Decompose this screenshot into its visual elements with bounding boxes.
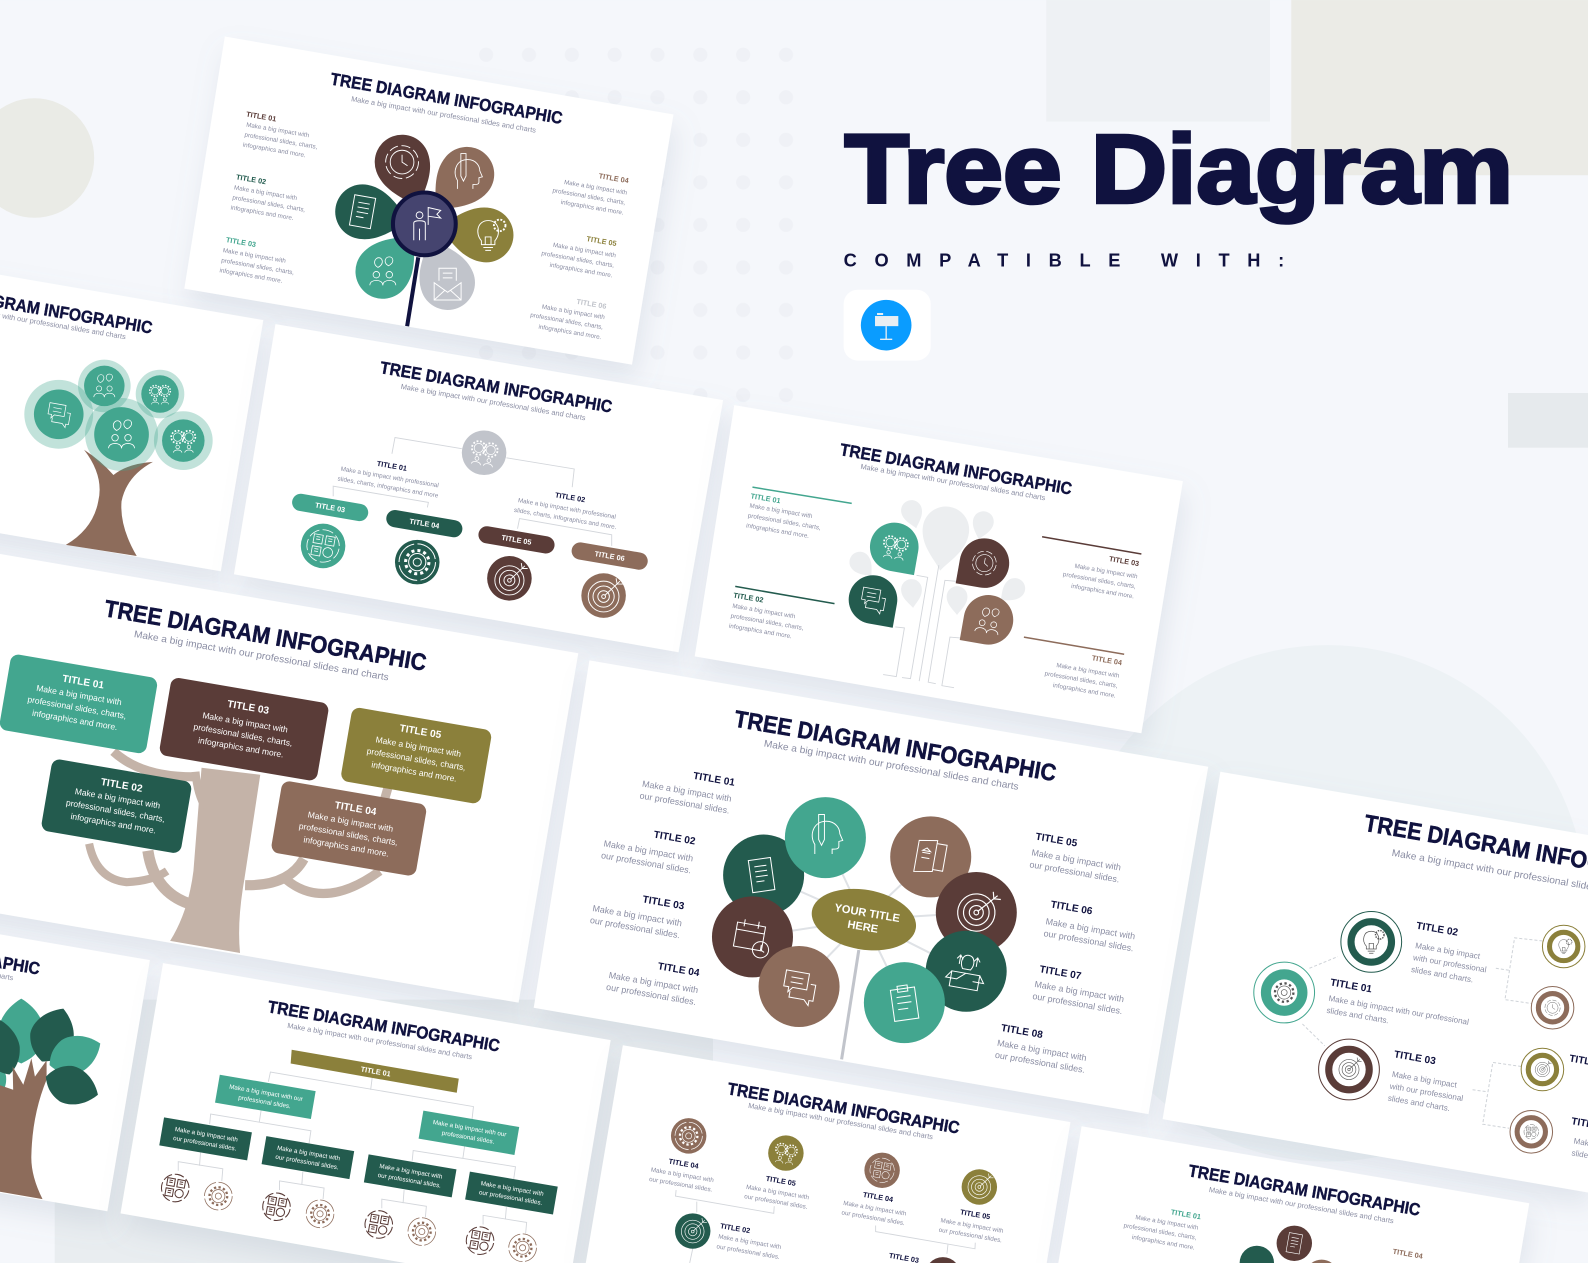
icon circles <box>301 524 626 618</box>
text: body 01: Make a big impact with <box>1135 1214 1199 1231</box>
flower diagram <box>331 127 518 318</box>
slide: flower tree <box>184 37 673 365</box>
heading: Tree Diagram: Tree Diagram <box>845 115 1513 224</box>
canopy circles <box>24 360 213 471</box>
tree lines <box>883 565 961 688</box>
text: body 01: slides, charts, infographics and more <box>337 475 439 499</box>
box: title 04: infographics and more. <box>303 834 390 859</box>
node: title 04 <box>671 1118 706 1154</box>
text: body 02: infographics and more. <box>230 204 294 222</box>
text: title 04: TITLE 04 <box>598 171 630 185</box>
text: body 01: Make a big impact with our professional <box>1328 993 1470 1026</box>
text: body 04: Make a big impact with <box>608 970 699 995</box>
text: body 05: infographics and more. <box>549 261 613 279</box>
green box 1 <box>159 1117 252 1160</box>
slide: org tree with pills <box>234 324 723 652</box>
rule line 04 <box>1024 637 1124 654</box>
text: body 02: Make a big impact with <box>718 1233 782 1251</box>
text: body 03: Make a big impact with <box>1074 562 1139 580</box>
text: title 01: TITLE 01 <box>692 771 736 789</box>
text: body 01: our professional slides. <box>639 790 730 816</box>
box: title 04: Make a big impact with <box>307 809 394 834</box>
text: body 05: Make a big impact with <box>1031 847 1122 872</box>
text: title 03: TITLE 03 <box>1393 1049 1437 1067</box>
slide: ring node tree <box>1163 772 1588 1192</box>
box: title 02: professional slides, charts, <box>65 797 166 824</box>
text: body 03: Make a big impact with <box>592 903 683 928</box>
node: title 01 <box>1254 962 1315 1023</box>
slide subtitle: Make a big impact with our professional slides and charts <box>133 629 390 684</box>
text: title 01: TITLE 01 <box>1329 977 1373 995</box>
text: body 06: infographics and more. <box>538 323 602 341</box>
tree nodes <box>1240 1226 1332 1263</box>
text: body 01: infographics and more. <box>746 522 810 540</box>
rule lines <box>752 487 852 503</box>
text: body 05 second: Make a big impact with <box>940 1217 1005 1234</box>
text: title 04: TITLE 04 <box>657 961 701 979</box>
text: body 03: our professional slides. <box>589 915 681 940</box>
text: title 03: TITLE 03 <box>1108 554 1140 568</box>
text: body 02: infographics and more. <box>728 622 793 640</box>
text: body 02: professional slides, charts, <box>232 194 306 213</box>
green box 2 <box>262 1136 354 1179</box>
front leaf <box>40 1059 104 1113</box>
text: body 03: slides and charts. <box>1387 1093 1451 1113</box>
slide subtitle: Make a big impact with our professional slides and charts <box>350 94 537 135</box>
text: body 05: our professional slides. <box>744 1193 808 1210</box>
pill: title 05 <box>477 525 556 555</box>
tree trunk <box>66 450 153 556</box>
box: title 04 <box>270 780 427 877</box>
slide: bottom right tree <box>1058 1126 1529 1263</box>
slide: circle canopy tree <box>0 257 263 571</box>
text: title 04: TITLE 04 <box>668 1157 700 1171</box>
tree stem <box>407 257 418 326</box>
box: title 03: professional slides, charts, <box>193 721 293 748</box>
text: body 05 second: our professional slides. <box>938 1226 1003 1244</box>
text: body 02: our professional slides. <box>600 850 692 875</box>
text: title 01: TITLE 01 <box>246 110 277 124</box>
icon: keynote badge <box>844 290 931 361</box>
text: body 04: infographics and more. <box>560 198 624 216</box>
tree trunk and branches <box>89 752 388 953</box>
text: body 03: infographics and more. <box>219 267 283 284</box>
text: body 04: our professional slides. <box>605 982 697 1007</box>
slide background <box>1163 772 1588 1192</box>
green box 3: our professional slides. <box>377 1171 442 1189</box>
slide background <box>0 546 578 1003</box>
pill: title 06: TITLE 06 <box>594 549 625 563</box>
text: body 06: our professional slides. <box>1043 928 1134 953</box>
centre oval: HERE <box>846 919 879 936</box>
green box 4: Make a big impact with <box>480 1180 545 1197</box>
teal box 2: professional slides. <box>441 1129 495 1145</box>
text: title 02: TITLE 02 <box>235 172 267 186</box>
text: title 03: TITLE 03 <box>225 235 257 249</box>
text: body 03: infographics and more. <box>1071 582 1135 600</box>
text: body 02: slides, charts, infographics and more. <box>514 506 617 531</box>
box: title 05: Make a big impact with <box>375 734 462 759</box>
pill: title 03 <box>291 492 370 522</box>
rule line 03 <box>1042 537 1141 554</box>
teal box 1 <box>215 1075 316 1119</box>
slide title: TREE DIAGRAM INFOGRAPHIC <box>732 706 1058 787</box>
centre oval: YOUR TITLE <box>833 902 901 925</box>
teal box 2: Make a big impact with our <box>432 1119 507 1138</box>
slide: hierarchy chart <box>121 963 611 1263</box>
tree trunk <box>0 1058 47 1199</box>
node: title 03 <box>1319 1039 1379 1100</box>
text: body 01: slides and charts. <box>1326 1005 1390 1025</box>
text: body 06: professional slides, charts, <box>530 311 604 331</box>
text: body 04: professional slides, charts, <box>552 187 626 206</box>
green box 4 <box>465 1172 558 1215</box>
slide subtitle: Make a big impact with our professional slides and charts <box>860 462 1046 502</box>
centre oval <box>807 881 921 958</box>
decorative large circle <box>1069 645 1586 1162</box>
box: title 02 <box>40 758 192 854</box>
leaves behind trunk <box>0 999 108 1098</box>
box: title 01: TITLE 01 <box>61 674 105 692</box>
text: title 07: TITLE 07 <box>1039 964 1082 982</box>
box: title 02: TITLE 02 <box>100 777 144 795</box>
text: body 03: with our professional <box>1388 1081 1464 1103</box>
green box 1: our professional slides. <box>173 1135 237 1152</box>
text: title 02: TITLE 02 <box>653 830 697 848</box>
connector spokes <box>752 838 976 1003</box>
text: body 08: our professional slides. <box>994 1050 1086 1075</box>
pill: title 06 <box>570 541 649 571</box>
slide title: TREE DIAGRAM INFOGRAPHIC <box>102 595 428 677</box>
slide: circles with brackets <box>586 1045 1070 1263</box>
slide title: TREE DIAGRAM INFOGRAPHIC <box>1187 1160 1422 1220</box>
slide subtitle: Make a big impact with our professional slides and charts <box>1208 1185 1395 1225</box>
bubble cluster right <box>864 816 1017 1043</box>
slide subtitle: Make a big impact with our professional slides and charts <box>747 1101 934 1141</box>
text: body 04: our professional slides. <box>649 1176 713 1193</box>
text: title 05: TITLE 05 <box>586 234 617 248</box>
green box 3 <box>364 1154 456 1197</box>
text: body 02: our professional slides. <box>716 1243 781 1261</box>
text: title 04: TITLE 04 <box>1392 1247 1424 1261</box>
slide subtitle: Make a big impact with our professional slides and charts <box>287 1021 473 1061</box>
small nodes <box>1510 925 1585 1153</box>
node: title 05 <box>768 1135 804 1171</box>
top node <box>462 430 506 475</box>
slide background <box>0 883 150 1211</box>
text: title 04: TITLE 04 <box>1091 653 1124 667</box>
text: title 05: TITLE 05 <box>1035 832 1078 850</box>
node: title 03 <box>930 1257 956 1263</box>
node: title 02 <box>1341 912 1402 972</box>
text: title 08: TITLE 08 <box>1000 1023 1044 1041</box>
text: body 03: Make a big impact with <box>222 247 287 264</box>
text: body 04 second: Make a big impact with <box>843 1199 907 1217</box>
slide title: TREE DIAGRAM INFOGRAPHIC <box>266 996 501 1056</box>
text: title 05: TITLE 05 <box>765 1174 797 1188</box>
small icons row <box>159 1172 536 1262</box>
box: title 05: professional slides, charts, <box>366 746 466 772</box>
slide title: TREE DIAGRAM INFOGRAPHIC <box>329 69 564 128</box>
decorative block bottom <box>55 1000 713 1263</box>
slide background <box>184 37 673 365</box>
slide background <box>586 1045 1070 1263</box>
green box 4: our professional slides. <box>478 1189 543 1206</box>
text: title 03: TITLE 03 <box>642 894 685 912</box>
title bar <box>291 1050 459 1093</box>
slide title: TREE DIAGRAM INFOGRAPHIC <box>379 357 614 417</box>
text: body 02: slides and charts. <box>1411 965 1474 984</box>
text: body 02: Make a big impact <box>1415 941 1482 961</box>
rule line 02 <box>735 586 835 604</box>
slide title: TREE DIAGRAM INFOGRAPHIC <box>839 439 1074 499</box>
subheading: compatible with: COMPATIBLE WITH: <box>844 250 1284 270</box>
box: title 01: infographics and more. <box>31 708 118 732</box>
text: body 01: Make a big impact with <box>246 121 310 139</box>
pill: title 04 <box>385 509 464 539</box>
box: title 02: infographics and more. <box>70 811 157 835</box>
bracket lines <box>676 1190 975 1263</box>
teal box 2 <box>419 1111 519 1155</box>
box: title 04: TITLE 04 <box>334 800 378 818</box>
text: body 01: Make a big impact with professional <box>340 465 439 489</box>
slide subtitle: Make a big impact with our professional slides and charts <box>763 739 1020 793</box>
decorative dot grid <box>475 44 799 410</box>
decorative circle left <box>0 98 94 218</box>
green box 2: Make a big impact with <box>277 1144 341 1162</box>
box: title 05 <box>340 707 492 804</box>
text: body 01: professional slides, charts, <box>244 131 318 151</box>
decorative block top right <box>1291 0 1588 175</box>
teal box 1: professional slides. <box>238 1094 292 1110</box>
text: body 04: Make a big impact with <box>1056 662 1120 679</box>
slide subtitle: Make a big impact with our professional slides and charts <box>400 382 587 422</box>
text: title 02: TITLE 02 <box>554 490 586 504</box>
slide background <box>121 963 611 1263</box>
text: body 04 second: our professional slides. <box>841 1209 906 1227</box>
green box 2: our professional slides. <box>275 1153 340 1171</box>
text: title 06: TITLE 06 <box>576 297 607 311</box>
node: title 04 second <box>864 1153 900 1188</box>
text: title 01: TITLE 01 <box>1170 1207 1202 1221</box>
node: title 02 <box>675 1213 710 1249</box>
text: title 02: TITLE 02 <box>1415 921 1459 939</box>
box: title 05: TITLE 05 <box>399 723 442 741</box>
bubble cluster left <box>712 797 866 1027</box>
slide: branching tree boxes <box>0 546 578 1003</box>
text: body 06: Make a big impact with <box>1045 916 1136 941</box>
text: body 06: Make a big impact with <box>541 303 606 321</box>
green box 1: Make a big impact with <box>174 1126 239 1143</box>
slide: teardrop tree <box>695 405 1183 733</box>
text: title 02: TITLE 02 <box>733 591 764 605</box>
text: title 04 second: TITLE 04 <box>862 1190 895 1204</box>
text: body 02: Make a big impact with <box>603 838 694 863</box>
text: body 01: Make a big impact with <box>641 779 732 804</box>
slide background <box>1058 1126 1529 1263</box>
text: body 08: Make a big impact with <box>996 1038 1087 1063</box>
box: title 03: Make a big impact with <box>202 710 289 735</box>
text: body 03: Make a big impact <box>1391 1069 1458 1089</box>
text: title 02: TITLE 02 <box>720 1221 751 1235</box>
pill: title 03: TITLE 03 <box>314 500 346 514</box>
slide: leaf tree <box>0 883 150 1211</box>
text: body 04: Make a big impact with <box>650 1166 715 1184</box>
slide title: TREE DIAGRAM INFOGRAPHIC <box>726 1078 961 1138</box>
text: body 07: our professional slides. <box>1032 991 1123 1016</box>
text: body 01: infographics and more. <box>242 141 307 159</box>
text: body 03: professional slides, charts, <box>1062 571 1137 590</box>
slide background <box>0 257 263 571</box>
text: title 01: TITLE 01 <box>376 459 408 473</box>
text: body 04: infographics and more. <box>1052 682 1117 699</box>
slide background <box>695 405 1183 733</box>
box: title 01: Make a big impact with <box>36 683 123 707</box>
text: body 02: Make a big impact with professional <box>517 497 616 520</box>
box: title 04: professional slides, charts, <box>298 821 399 847</box>
title bar: TITLE 01 <box>360 1065 391 1079</box>
text: body 01: Make a big impact with <box>749 502 814 520</box>
text: body 04: Make a big impact with <box>564 179 628 196</box>
text: body 02: professional slides, charts, <box>730 612 804 632</box>
text: title 05 second: TITLE 05 <box>960 1207 991 1221</box>
text: body 01: professional slides, charts, <box>1123 1222 1197 1241</box>
text: body 05: our professional slides. <box>1029 859 1120 885</box>
box: title 01: professional slides, charts, <box>27 694 127 721</box>
connector lines <box>333 438 612 546</box>
text: body 01: infographics and more. <box>1131 1234 1196 1251</box>
text: title 06: TITLE 06 <box>1050 899 1094 917</box>
text: body 02: with our professional <box>1412 952 1487 974</box>
green box 3: Make a big impact with <box>379 1163 443 1180</box>
grey background drops <box>845 498 1029 615</box>
text: body 02: Make a big impact with <box>732 602 796 620</box>
slide background <box>234 324 723 652</box>
box: title 03: infographics and more. <box>197 735 284 759</box>
text: body 03: professional slides, charts, <box>221 257 295 276</box>
colored drops <box>845 519 1017 649</box>
slide background <box>534 660 1208 1114</box>
box: title 05: infographics and more. <box>371 759 458 784</box>
text: body 07: Make a big impact with <box>1034 979 1125 1004</box>
decorative block top <box>1046 0 1270 122</box>
stem <box>842 950 859 1059</box>
text: title 01: TITLE 01 <box>750 491 781 505</box>
box: title 01 <box>0 653 158 754</box>
text: body 02: Make a big impact with <box>234 184 298 202</box>
dashed connectors <box>1302 938 1542 1128</box>
text: body 04: professional slides, charts, <box>1044 670 1118 689</box>
pill: title 05: TITLE 05 <box>501 533 532 547</box>
node: title 05 second <box>962 1169 997 1205</box>
text: body 01: professional slides, charts, <box>747 512 822 531</box>
decorative block right <box>1508 393 1588 448</box>
teal box 1: Make a big impact with our <box>229 1083 303 1103</box>
text: body 05: Make a big impact with <box>746 1183 810 1201</box>
box: title 03: TITLE 03 <box>226 699 270 717</box>
pill: title 04: TITLE 04 <box>409 517 441 531</box>
slide: bubble tree <box>534 660 1208 1114</box>
connector lines <box>178 1072 527 1234</box>
text: body 05: Make a big impact with <box>553 241 617 259</box>
text: body 05: professional slides, charts, <box>541 250 615 269</box>
box: title 03 <box>159 677 330 782</box>
box: title 02: Make a big impact with <box>74 786 161 811</box>
